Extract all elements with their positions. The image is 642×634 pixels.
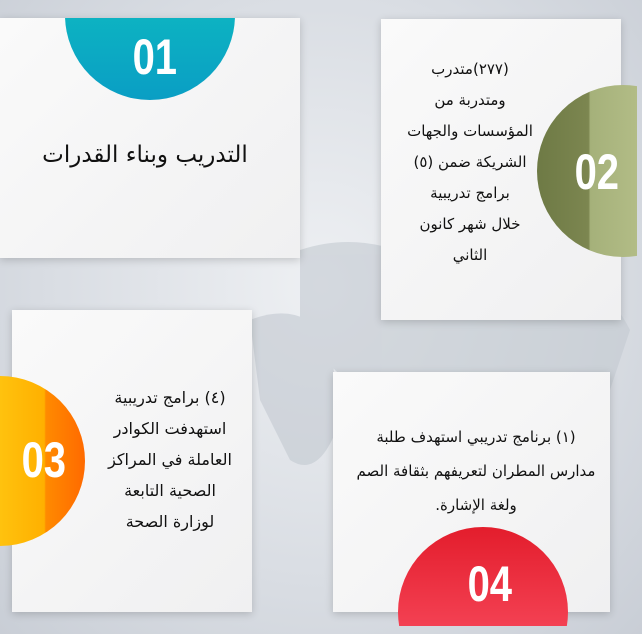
text 01: التدريب وبناء القدرات — [42, 142, 248, 168]
text 03 — [107, 388, 232, 531]
text 02: الشريكة ضمن (٥) — [413, 153, 527, 171]
text 03: الصحية التابعة — [124, 481, 216, 500]
number 01: 01 — [133, 29, 177, 85]
text 02: الثاني — [453, 246, 487, 264]
panel 02 — [381, 19, 621, 320]
text 02: ومتدربة من — [434, 91, 506, 109]
text 04: (١) برنامج تدريبي استهدف طلبة — [376, 428, 576, 446]
text 03: (٤) برامج تدريبية — [114, 388, 226, 407]
text 02 — [407, 60, 533, 264]
panel 03 — [12, 310, 252, 612]
panel 01 — [0, 18, 300, 258]
text 03: العاملة في المراكز — [108, 450, 232, 469]
text 04: مدارس المطران لتعريفهم بثقافة الصم — [357, 462, 595, 480]
circle 01 — [65, 0, 235, 100]
circle 04 — [398, 527, 568, 626]
circle 02 — [537, 85, 637, 257]
number 03: 03 — [22, 432, 66, 488]
text 03: لوزارة الصحة — [126, 512, 214, 531]
text 02: برامج تدريبية — [430, 184, 510, 202]
number 04: 04 — [468, 556, 512, 612]
text 02: (٢٧٧)متدرب — [431, 60, 509, 78]
text 02: المؤسسات والجهات — [407, 122, 533, 140]
text 03: استهدفت الكوادر — [114, 419, 226, 438]
number 02: 02 — [575, 144, 619, 200]
panel 04 — [333, 372, 610, 612]
text 04 — [357, 428, 595, 514]
text 02: خلال شهر كانون — [419, 215, 521, 233]
text 04: ولغة الإشارة. — [435, 496, 517, 514]
circle 03 — [0, 376, 85, 546]
